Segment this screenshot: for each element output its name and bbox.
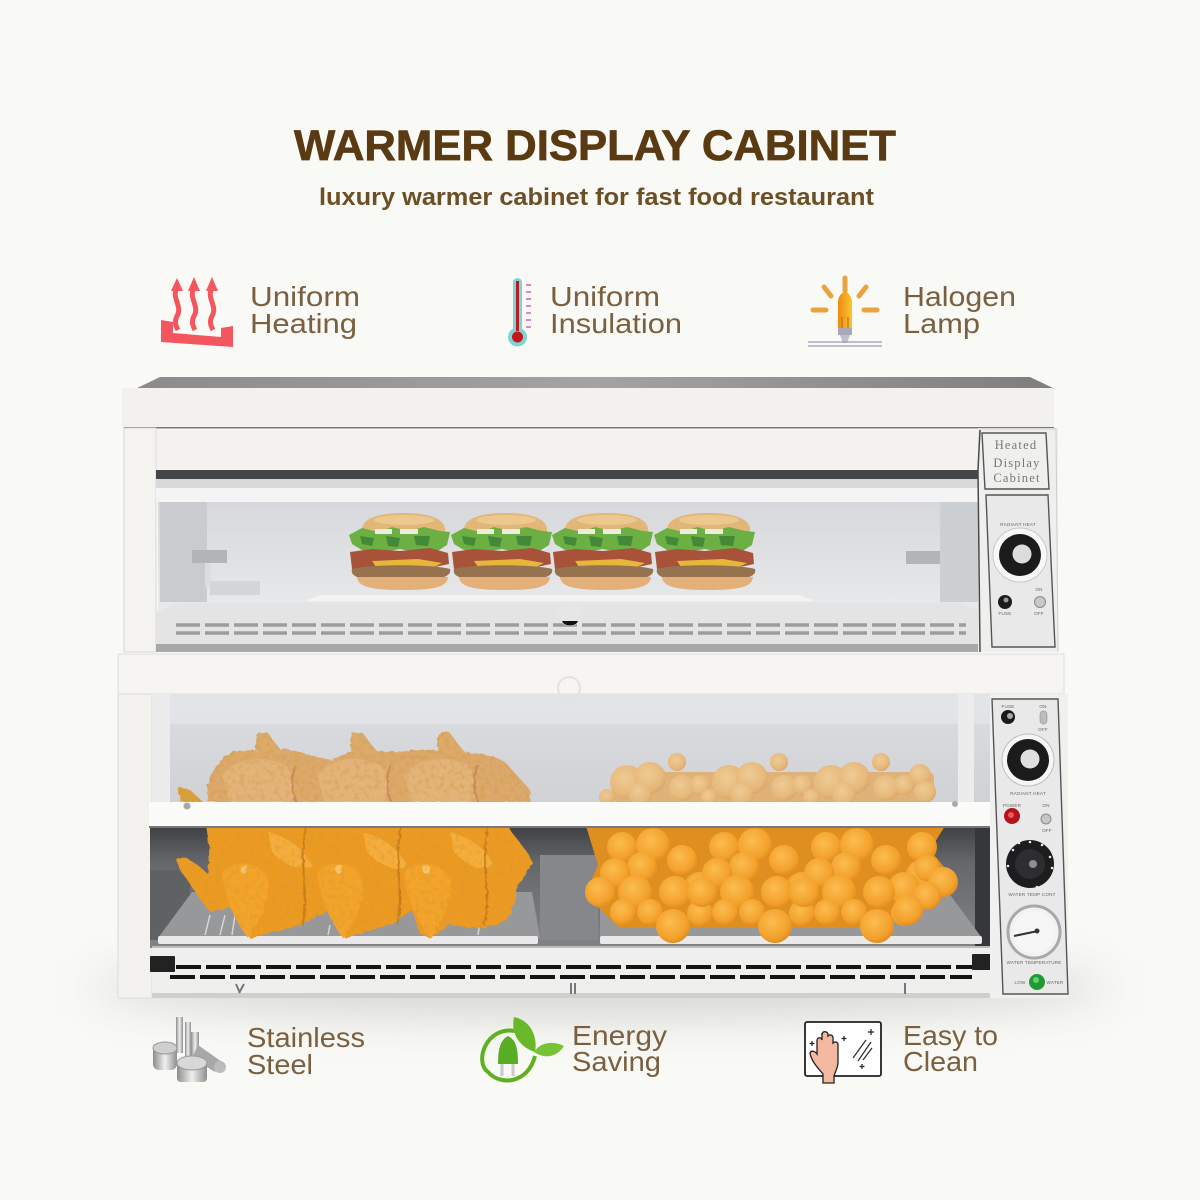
nuggets below rail (585, 826, 958, 943)
icon: steel fittings (153, 1017, 226, 1082)
label: Stainless (247, 1022, 365, 1053)
right tray (600, 892, 982, 944)
low water light: LOW (1014, 980, 1026, 985)
white glass rail (149, 801, 993, 828)
fuse and switch: FUSE (1001, 704, 1015, 709)
lower left post (118, 694, 152, 998)
burger 4 (654, 513, 755, 590)
title: WARMER DISPLAY CABINET (294, 122, 896, 170)
cabinet floor shadow (90, 958, 1110, 1018)
sign plate (982, 433, 1049, 489)
lower handle (558, 677, 580, 699)
icon: hand wiping glass (805, 1022, 881, 1083)
low water light (1014, 974, 1064, 990)
feature: stainless steel (153, 1017, 365, 1082)
power light: ON (1042, 803, 1050, 808)
feature: halogen lamp: Lamp (903, 308, 980, 339)
icon: thermometer (508, 278, 531, 346)
upper control column (978, 428, 1058, 652)
chicken seen through glass (177, 732, 530, 802)
upper vented front (156, 603, 982, 652)
sign plate: Heated (995, 438, 1037, 452)
warmer cabinet (118, 377, 1068, 998)
shelf plate (305, 595, 815, 601)
upper switch panel: FUSE (998, 611, 1012, 616)
left tray (158, 892, 540, 944)
water gauge: WATER TEMPERATURE (1006, 960, 1062, 965)
interior (150, 826, 993, 948)
feature: easy to clean: Clean (903, 1046, 978, 1077)
feature: uniform heating: Heating (250, 308, 357, 339)
upper glass window (158, 502, 982, 614)
subtitle: luxury warmer cabinet for fast food restaurant (319, 184, 874, 211)
feature: easy to clean (805, 1020, 998, 1083)
fuse and switch: ON (1039, 704, 1047, 709)
upper switch panel: RADIANT HEAT (1000, 522, 1036, 527)
label: Halogen (903, 281, 1016, 312)
icon: heat rising from tray (161, 277, 233, 347)
lower control panel (990, 694, 1068, 998)
power light: POWER (1003, 803, 1022, 808)
top lid (122, 377, 1055, 428)
icon: plug and leaves (482, 1017, 564, 1080)
icon: halogen lamp (808, 278, 882, 346)
burger 2 (451, 513, 552, 590)
feature: uniform heating (161, 277, 360, 347)
fried chicken (177, 732, 532, 938)
chicken below rail (177, 826, 532, 938)
upper switch panel: ON (1035, 587, 1043, 592)
lower window (152, 694, 990, 804)
upper switch panel (986, 495, 1055, 647)
lower top band (118, 654, 1064, 694)
burger 1 (349, 513, 450, 590)
water temperature knob (1006, 840, 1056, 897)
label: Uniform (250, 281, 360, 312)
burger 3 (552, 513, 653, 590)
power light (1003, 803, 1052, 833)
feature: stainless steel: Steel (247, 1049, 313, 1080)
upper front band (157, 430, 978, 470)
low water light: WATER (1046, 980, 1064, 985)
feature: halogen lamp (808, 278, 1016, 346)
upper tier (124, 428, 1058, 652)
label: Energy (572, 1020, 667, 1051)
lower vented front (150, 946, 996, 998)
upper switch panel: OFF (1034, 611, 1044, 616)
power light: OFF (1042, 828, 1052, 833)
upper left post (124, 428, 156, 652)
fuse and switch (1001, 704, 1048, 732)
feature: uniform insulation (508, 278, 682, 346)
upper handle (558, 602, 582, 626)
nuggets seen through glass (599, 753, 936, 806)
feature: uniform insulation: Insulation (550, 308, 682, 339)
sign plate: Cabinet (993, 471, 1041, 485)
label: Easy to (903, 1020, 998, 1051)
label: Uniform (550, 281, 660, 312)
feature: energy saving: Saving (572, 1046, 661, 1077)
water gauge (1006, 906, 1062, 965)
water temperature knob: WATER TEMP CONT (1008, 892, 1056, 897)
radiant heat knob (1002, 734, 1054, 796)
fuse and switch: OFF (1038, 727, 1048, 732)
chicken nuggets (585, 753, 958, 943)
sign plate: Display (993, 456, 1041, 470)
lower tier (118, 654, 1068, 998)
feature: energy saving (482, 1017, 667, 1080)
radiant heat knob: RADIANT HEAT (1010, 791, 1046, 796)
